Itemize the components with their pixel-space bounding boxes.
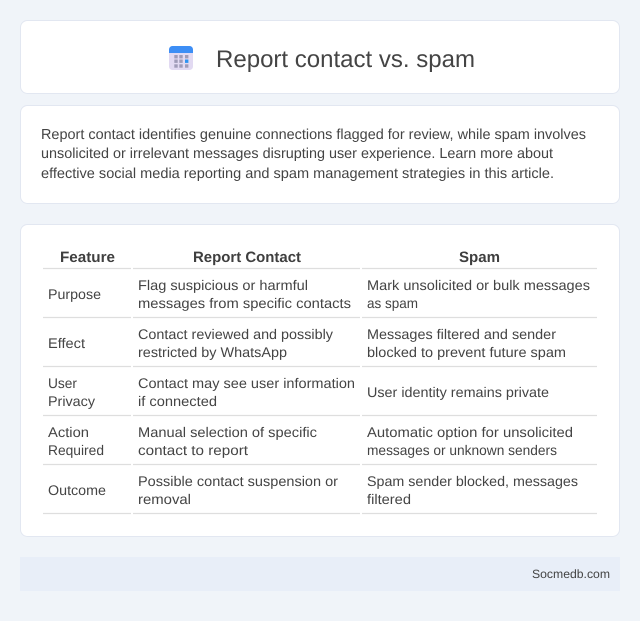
table header row: Spam: [459, 249, 500, 266]
title: Report contact vs. spam: [216, 46, 475, 73]
table row: action required: Action: [48, 424, 89, 440]
table row: effect: restricted by WhatsApp: [138, 344, 287, 360]
icon: calendar: [169, 46, 193, 70]
table row: user privacy: Privacy: [48, 393, 95, 409]
table row: outcome: Possible contact suspension or: [138, 473, 338, 489]
table row: action required: Required: [48, 442, 104, 458]
footer text: Socmedb.com: [532, 567, 610, 581]
table header row: [43, 249, 597, 268]
table row: outcome: filtered: [367, 491, 411, 507]
table row: effect: Messages filtered and sender: [367, 326, 556, 342]
panel: footer: [20, 557, 620, 591]
table row: outcome: removal: [138, 491, 191, 507]
text block: description: unsolicited or irrelevant messages disrupting user experience. Learn more about: [41, 146, 553, 162]
panel: description: [20, 106, 620, 204]
table row: purpose: as spam: [367, 295, 418, 311]
table row: user privacy: if connected: [138, 393, 217, 409]
table row: purpose: messages from specific contacts: [138, 295, 351, 311]
panel: comparison table: [20, 224, 620, 536]
text block: description: effective social media reporting and spam management strategies in this article.: [41, 166, 554, 182]
table row: action required: Manual selection of specific: [138, 424, 317, 440]
table row: effect: [43, 326, 597, 366]
table row: outcome: Spam sender blocked, messages: [367, 473, 578, 489]
table row: action required: Automatic option for unsolicited: [367, 424, 573, 440]
panel: header: [20, 20, 620, 94]
table row: user privacy: Contact may see user information: [138, 375, 355, 391]
table row: purpose: Flag suspicious or harmful: [138, 277, 308, 293]
text block: description: [41, 127, 586, 182]
table row: action required: [43, 424, 597, 464]
table row: effect: Contact reviewed and possibly: [138, 326, 333, 342]
table row: effect: blocked to prevent future spam: [367, 344, 566, 360]
table row: user privacy: [43, 375, 597, 416]
text block: description: Report contact identifies genuine connections flagged for review, while spam involves: [41, 127, 586, 143]
table row: outcome: Outcome: [48, 482, 106, 498]
table header row: Feature: [60, 249, 115, 266]
table row: purpose: Purpose: [48, 286, 101, 302]
table row: action required: contact to report: [138, 442, 248, 458]
table row: action required: messages or unknown senders: [367, 442, 557, 458]
table row: effect: Effect: [48, 335, 85, 351]
table row: outcome: [43, 473, 597, 514]
table row: purpose: [43, 277, 597, 318]
table row: purpose: Mark unsolicited or bulk messages: [367, 277, 590, 293]
table header row: Report Contact: [193, 249, 301, 266]
table row: user privacy: User: [48, 375, 77, 391]
table row: user privacy: User identity remains private: [367, 384, 549, 400]
